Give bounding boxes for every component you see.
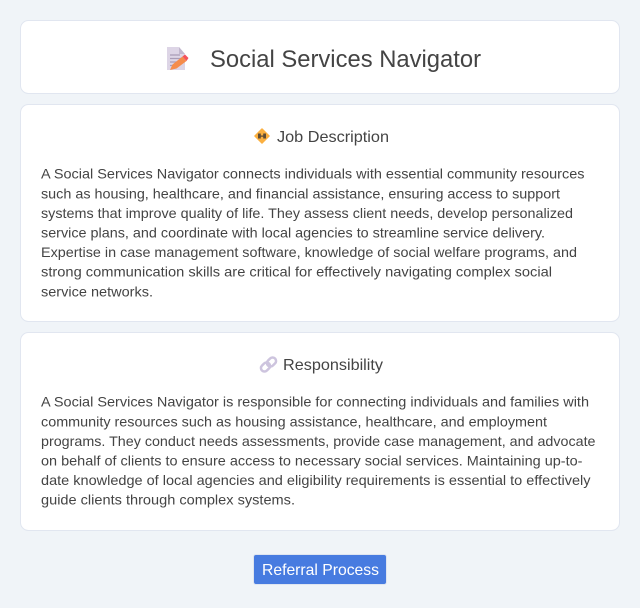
heading: job description: Job Description <box>277 129 389 146</box>
icon: orange diamond sign <box>255 129 269 143</box>
button: referral process <box>254 554 386 584</box>
text block: responsibility: date knowledge of local agencies and eligibility requirements is essential to effectively <box>41 472 590 488</box>
title: Social Services Navigator <box>210 46 481 73</box>
button: referral process: Referral Process <box>262 562 379 579</box>
panel: title card <box>20 20 620 94</box>
text block: responsibility: community resources such as housing assistance, healthcare, and employment <box>41 413 547 429</box>
text block: job description: Expertise in case management software, knowledge of social welfare programs, and <box>41 244 577 260</box>
text block: job description: service networks. <box>41 283 153 299</box>
text block: responsibility: A Social Services Navigator is responsible for connecting individuals and families with <box>41 394 589 410</box>
icon: chain link <box>259 356 278 373</box>
text block: job description: strong communication skills are critical for effectively navigating complex social <box>41 264 552 280</box>
icon: document with pencil <box>167 47 188 70</box>
text block: job description: systems that improve quality of life. They assess client needs, develop personalized <box>41 205 573 221</box>
panel: responsibility <box>20 332 620 530</box>
text block: job description: such as housing, healthcare, and financial assistance, ensuring access to support <box>41 185 560 201</box>
text block: responsibility: programs. They conduct needs assessments, provide case management, and advocate <box>41 433 596 449</box>
text block: responsibility <box>41 394 596 508</box>
text block: job description: A Social Services Navigator connects individuals with essential community resources <box>41 166 584 182</box>
text block: job description <box>41 166 584 299</box>
text block: responsibility: on behalf of clients to ensure access to necessary social services. Maintaining up-to- <box>41 452 583 468</box>
heading: responsibility: Responsibility <box>283 357 383 374</box>
panel: job description <box>20 104 620 322</box>
text block: responsibility: guide clients through complex systems. <box>41 492 295 508</box>
text block: job description: service plans, and coordinate with local agencies to streamline service delivery. <box>41 224 545 240</box>
